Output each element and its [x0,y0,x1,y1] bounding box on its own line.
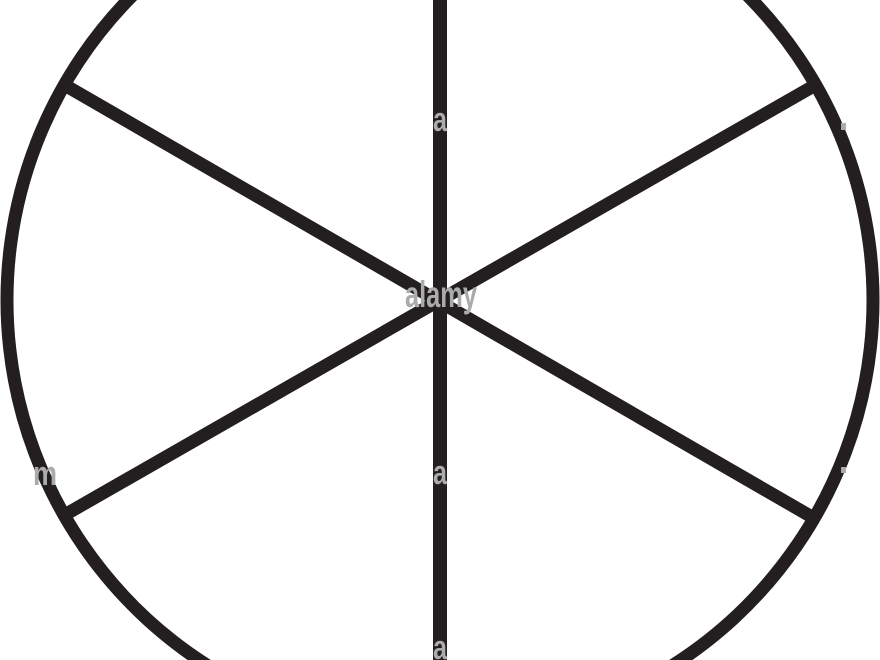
watermark: alamy [405,274,477,315]
watermark: a [433,101,448,139]
watermark [33,101,846,660]
watermark: m [33,455,57,493]
watermark: a [433,454,448,492]
